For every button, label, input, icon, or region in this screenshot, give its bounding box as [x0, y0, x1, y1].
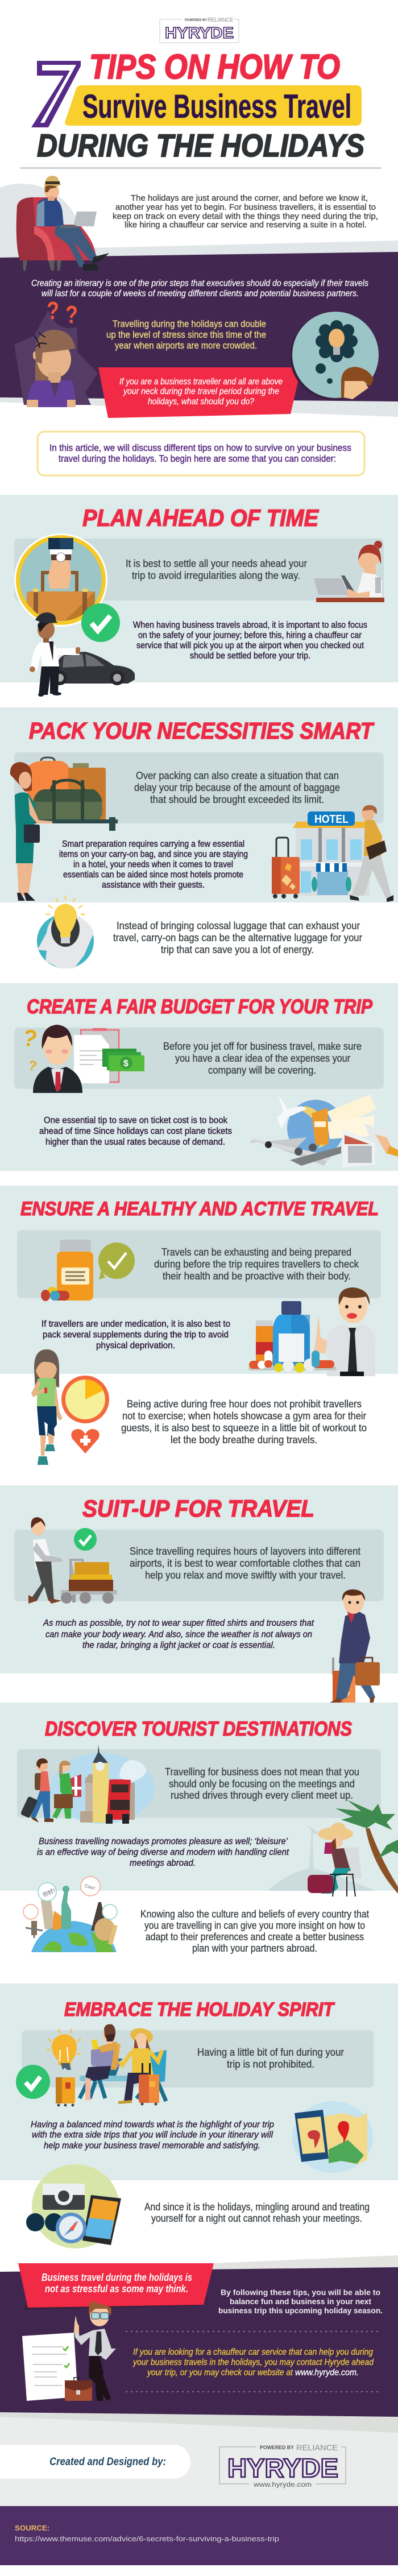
text: exhausting travels: during before the trip requires travellers to check — [154, 1258, 359, 1270]
text: expenses — [163, 1041, 362, 1076]
title — [31, 48, 364, 163]
text: itinerary statement: will last for a couple of weeks of meeting different clients and potential business partners. — [42, 289, 359, 299]
callout: red question box — [98, 367, 301, 418]
logo: Hyryde footer: RELIANCE — [296, 2443, 338, 2452]
panel: ensure a healthy and active travel — [0, 1186, 398, 1376]
illustration: hand holding suitcase — [14, 533, 107, 631]
pill: created and designed by: Created and Designed by: — [49, 2456, 166, 2468]
text: ticket cost: One essential tip to save on ticket cost is to book — [44, 1116, 228, 1125]
illustration: businessman with checklist and briefcase — [22, 2301, 116, 2401]
text: smart preparation: items on your carry-on bag, and since you are staying — [59, 850, 248, 859]
text: intro paragraph — [113, 194, 378, 230]
illustration: businessman with budget papers — [20, 1024, 144, 1093]
text: settle your needs — [126, 558, 307, 581]
text: exhausting travels: their health and be proactive with their body. — [163, 1270, 351, 1282]
text: smart preparation: assistance with their guests. — [102, 880, 205, 890]
text: medication: physical deprivation. — [96, 1341, 175, 1351]
logo: Hyryde footer: www.hyryde.com — [253, 2480, 312, 2488]
text: being active: not to exercise; when hotels showcase a gym area for their — [122, 1410, 366, 1422]
text: intro paragraph: another year has yet to begin. For business travellers, it is essential to — [115, 203, 376, 212]
text: carry-on bags: Instead of bringing colossal luggage that can exhaust your — [117, 920, 360, 931]
illustration: world landmarks on a globe — [23, 1877, 118, 1952]
panel: embrace the holiday spirit — [0, 1983, 398, 2180]
illustration: travellers and London landmarks — [20, 1745, 156, 1824]
text: contact Hyryde: your trip, or you may check our website at — [147, 2368, 293, 2378]
text: expenses: you have a clear idea of the expenses your — [175, 1053, 350, 1064]
text: ticket cost — [39, 1116, 232, 1147]
text: exhausting travels — [154, 1246, 359, 1282]
panel: pack your necessities smart — [0, 707, 398, 902]
illustration: doctor with medicine bottles — [248, 1287, 375, 1376]
text: over packing — [134, 770, 340, 805]
text: balanced mind: with the extra side trips that you will include in your itinerary will — [32, 2130, 273, 2140]
illustration: world landmarks on a globe: Ciao! — [84, 1883, 96, 1891]
text: contact Hyryde — [132, 2347, 374, 2378]
text: settle your needs: trip to avoid irregularities along the way. — [132, 570, 300, 581]
text: night out: And since it is the holidays, mingling around and treating — [144, 2201, 370, 2213]
text: business not only meetings — [165, 1766, 359, 1801]
text: smart preparation: in a hotel, your needs when it comes to travel — [73, 860, 233, 869]
text: safety of journey: When having business travels abroad, it is important to also focus — [133, 620, 367, 630]
text: bleisure: meetings abroad. — [130, 1858, 196, 1868]
text: bleisure — [37, 1837, 289, 1868]
text: fun during trip: trip is not prohibited. — [227, 2059, 314, 2070]
logo: Hyryde footer: POWERED BY — [260, 2445, 294, 2450]
text: exhausting travels: Travels can be exhausting and being prepared — [161, 1246, 351, 1258]
panel: closing purple band — [0, 2255, 398, 2506]
text: balanced mind — [31, 2120, 274, 2151]
illustration: businessman with budget papers: $ — [123, 1059, 128, 1068]
text: medication — [42, 1319, 230, 1351]
text: holiday stress: up the level of stress since this time of the — [106, 329, 266, 340]
heading: embrace: EMBRACE THE HOLIDAY SPIRIT — [64, 1999, 335, 2020]
illustration: thinking person with lightbulb — [290, 312, 379, 400]
text: fitted shirts: the radar, bringing a light jacket or coat is essential. — [82, 1641, 275, 1650]
illustration: chauffeur with car — [30, 612, 135, 697]
text: being active — [121, 1398, 367, 1446]
text: intro paragraph: like hiring a chauffeur car service and reserving a suite in a hotel. — [125, 221, 367, 230]
text: culture and beliefs: Knowing also the culture and beliefs of every country that — [140, 1908, 369, 1920]
text: culture and beliefs: adapt to their preferences and create a better business — [146, 1931, 364, 1943]
illustration: stressed woman with question marks: ? — [47, 297, 59, 325]
illustration: worried man with suitcase — [329, 1589, 380, 1708]
text: carry-on bags — [113, 920, 362, 955]
illustration: woman relaxing under palm trees — [267, 1800, 398, 1896]
icon: green check — [81, 603, 120, 642]
text: intro paragraph: The holidays are just around the corner, and before we know it, — [131, 194, 368, 203]
logo: Hyryde top: RELIANCE — [208, 17, 233, 23]
text: following these tips — [218, 2288, 383, 2315]
text: comfortable clothes: help you relax and move swiftly with your travel. — [145, 1569, 346, 1581]
panel: intro article box: In this article, we will discuss different tips on how to survive on your business — [49, 442, 351, 453]
text: business not only meetings: Travelling for business does not mean that you — [165, 1766, 359, 1778]
illustration: stressed woman with question marks — [14, 297, 98, 407]
illustration: phone and map — [292, 2101, 373, 2173]
panel: footer source: SOURCE: — [15, 2524, 49, 2532]
band: purple intro band — [0, 184, 398, 417]
title number 7 — [31, 61, 81, 127]
text: medication: If travellers are under medication, it is also best to — [42, 1319, 230, 1329]
pill: created and designed by — [0, 2445, 190, 2479]
illustration: woman running, timer and heart — [31, 1349, 109, 1465]
illustration: plane, globe, tickets and calendar — [250, 1095, 398, 1167]
text: safety of journey: on the safety of your journey; before this, hiring a chauffeur car — [138, 631, 362, 640]
illustration: hotel, suitcase and traveller: HOTEL — [314, 813, 349, 826]
illustration: stressed woman with question marks: ? — [65, 301, 78, 329]
text: night out — [144, 2201, 370, 2224]
text: intro paragraph: keep on track on every detail with the things they need during the trip, — [113, 212, 378, 221]
text: night out: yourself for a night out cannot rehash your meetings. — [151, 2213, 362, 2224]
illustration: lightbulb in head — [37, 896, 94, 968]
heading: suit-up: SUIT-UP FOR TRAVEL — [82, 1495, 314, 1522]
text: following these tips: By following these tips, you will be able to — [221, 2288, 380, 2297]
text: bleisure: Business travelling nowadays promotes pleasure as well; ‘bleisure’ — [39, 1837, 288, 1846]
text: safety of journey: service that will pick you up at the airport when you checked out — [136, 641, 364, 651]
illustration: businessman with budget papers: ? — [20, 1024, 40, 1053]
text: expenses: Before you jet off for business travel, make sure — [163, 1041, 362, 1052]
text: being active: guests, it is also best to squeeze in a little bit of workout to — [121, 1422, 367, 1434]
panel: suit-up for travel — [0, 1485, 398, 1674]
text: bleisure: is an effective way of being diverse and modern with handling client — [37, 1848, 289, 1857]
text: fun during trip — [197, 2047, 344, 2070]
text: culture and beliefs: you are travelling in can give you more insight on how to — [144, 1920, 365, 1931]
callout: red closing banner: Business travel during the holidays is — [42, 2272, 192, 2283]
illustration: couple with luggage and idea bulb — [16, 2024, 167, 2106]
text: expenses: company will be covering. — [208, 1065, 316, 1076]
text: carry-on bags: travel, carry-on bags can be the alternative luggage for your — [113, 932, 362, 943]
text: holiday stress — [106, 318, 266, 351]
text: fitted shirts: As much as possible, try not to wear super fitted shirts and trousers that — [43, 1618, 314, 1628]
text: fun during trip: Having a little bit of fun during your — [197, 2047, 344, 2058]
text: fitted shirts — [43, 1618, 314, 1650]
text: safety of journey: should be settled before your trip. — [190, 651, 310, 661]
text: itinerary statement — [31, 279, 368, 299]
text: over packing: Over packing can also create a situation that can — [136, 770, 339, 781]
illustration: man pushing luggage trolley — [28, 1517, 117, 1604]
illustration: woman with luggage — [10, 757, 118, 901]
panel: plan ahead of time — [0, 495, 398, 682]
text: comfortable clothes: airports, it is best to wear comfortable clothes that can — [130, 1558, 360, 1569]
callout: red closing banner — [18, 2263, 214, 2310]
panel: create a fair budget — [0, 983, 398, 1171]
panel: intro article box — [38, 432, 364, 475]
text: culture and beliefs — [140, 1908, 369, 1954]
text: safety of journey — [133, 620, 367, 661]
panel: footer source — [0, 2506, 398, 2565]
text: comfortable clothes — [130, 1546, 360, 1581]
icon: green check small — [74, 1528, 97, 1551]
text: business not only meetings: should only be focusing on the meetings and — [169, 1778, 355, 1790]
text: being active: Being active during free hour does not prohibit travellers — [127, 1398, 362, 1410]
illustration: hotel, suitcase and traveller — [272, 805, 393, 902]
heading: plan ahead: PLAN AHEAD OF TIME — [82, 504, 320, 531]
text: settle your needs: It is best to settle all your needs ahead your — [126, 558, 307, 569]
text: balanced mind: Having a balanced mind towards what is the highlight of your trip — [31, 2120, 274, 2130]
illustration: camera, sunglasses, compass and phone — [26, 2164, 121, 2248]
text: following these tips: business trip this upcoming holiday season. — [218, 2306, 383, 2315]
panel: discover tourist destinations — [0, 1703, 398, 1891]
callout: red question box: your neck during the travel period during the — [123, 387, 279, 396]
text: holiday stress: Travelling during the holidays can double — [113, 318, 266, 329]
illustration: medicine bottle and check bubble — [41, 1240, 135, 1301]
text: being active: let the body breathe during travels. — [171, 1434, 317, 1446]
logo: Hyryde top: HYRYDE — [165, 24, 234, 42]
illustration: woman at laptop — [314, 541, 384, 602]
logo: Hyryde footer — [219, 2443, 346, 2488]
title line: tips on how to: TIPS ON HOW TO — [89, 48, 340, 86]
text: culture and beliefs: plan with your partners abroad. — [192, 1943, 317, 1954]
text: fitted shirts: can make your body weary. And also, since the weather is not always on — [45, 1630, 312, 1639]
logo: Hyryde top — [160, 16, 239, 43]
logo: Hyryde footer: HYRYDE — [227, 2453, 338, 2483]
callout: red question box: If you are a business traveller and all are above — [119, 377, 283, 387]
text: ticket cost: higher than the usual rates because of demand. — [45, 1137, 225, 1147]
callout: red question box: holidays, what should you do? — [148, 397, 254, 407]
text: medication: pack several supplements during the trip to avoid — [43, 1330, 229, 1340]
illustration: man on armchair with laptop — [16, 176, 109, 271]
text: balanced mind: help make your business travel memorable and satisfying. — [44, 2141, 260, 2151]
text: smart preparation — [59, 839, 248, 890]
text: smart preparation: essentials can be aided since most hotels promote — [63, 870, 243, 880]
title line: during the holidays: DURING THE HOLIDAYS — [37, 127, 364, 163]
callout: red closing banner: not as stressful as some may think. — [45, 2283, 188, 2295]
logo: Hyryde top: POWERED BY — [185, 19, 207, 22]
text: ticket cost: ahead of time Since holidays can cost plane tickets — [39, 1127, 232, 1136]
text: over packing: that should be brought exceeded its limit. — [150, 794, 324, 805]
illustration: businessman with budget papers: ? — [27, 1058, 38, 1075]
text: smart preparation: Smart preparation requires carrying a few essential — [62, 839, 244, 849]
heading: discover: DISCOVER TOURIST DESTINATIONS — [45, 1718, 352, 1740]
text: carry-on bags: trip that can save you a lot of energy. — [161, 944, 314, 955]
text: following these tips: balance fun and business in your next — [230, 2297, 371, 2306]
panel: footer source: https://www.themuse.com/advice/6-secrets-for-surviving-a-business-trip — [15, 2534, 279, 2543]
text: business not only meetings: rushed drives through every client meet up. — [171, 1790, 353, 1801]
panel: intro article box: travel during the holidays. To begin here are some that you can consider: — [59, 453, 336, 464]
text: holiday stress: year when airports are more crowded. — [115, 340, 257, 351]
text: comfortable clothes: Since travelling requires hours of layovers into different — [130, 1546, 360, 1557]
illustration: world landmarks on a globe: 你好! — [42, 1887, 56, 1899]
text: contact Hyryde: www.hyryde.com. — [295, 2368, 359, 2378]
text: over packing: delay your trip because of the amount of baggage — [134, 782, 340, 793]
